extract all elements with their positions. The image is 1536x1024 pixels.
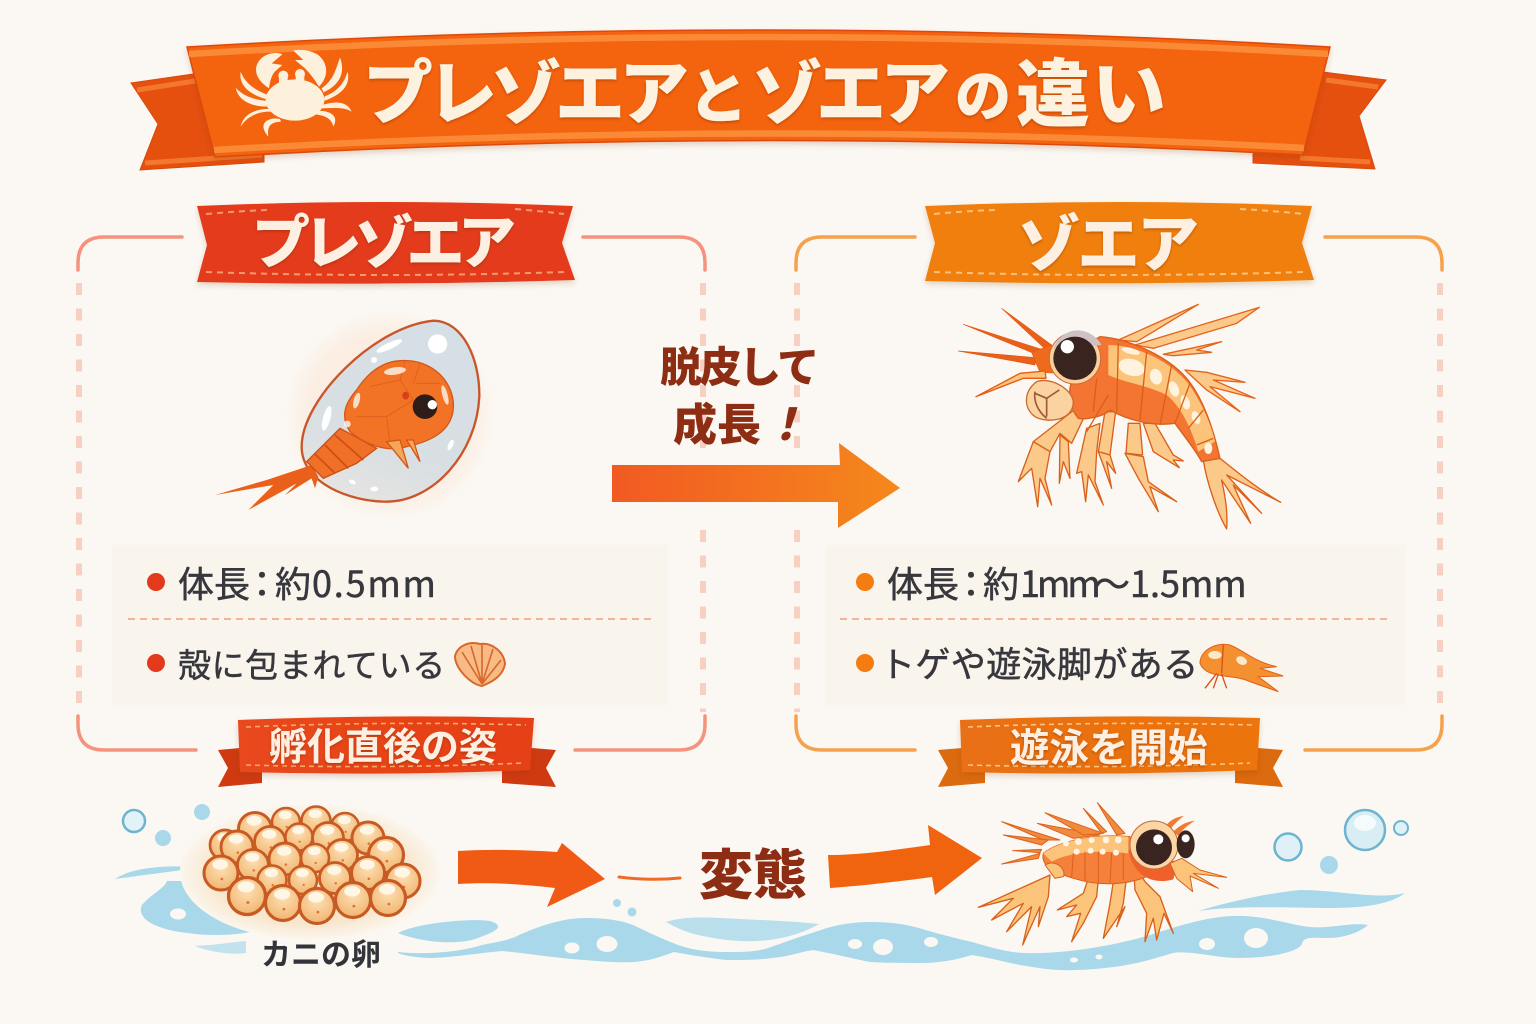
icon: seashell xyxy=(455,643,505,686)
heading ribbon: プレゾエア xyxy=(197,202,575,284)
body back band xyxy=(1043,836,1128,862)
text: body length: 1mm xyxy=(1020,556,1098,608)
larva head xyxy=(345,361,453,449)
ribbon: just after hatching: 孵化直後の姿 xyxy=(269,727,497,769)
text: body length: 体長 xyxy=(887,564,959,605)
banner main ribbon xyxy=(187,30,1330,157)
tail fan xyxy=(978,875,1050,945)
info box xyxy=(112,545,668,705)
heading ribbon: ゾエア: ゾエア xyxy=(1018,211,1197,280)
egg shell xyxy=(302,321,479,502)
title text: 違い xyxy=(1016,53,1168,136)
title text: と xyxy=(688,64,748,131)
head xyxy=(1128,850,1178,881)
eyes xyxy=(1130,821,1178,869)
bullet: shell xyxy=(147,654,165,672)
bullet: spines xyxy=(856,654,874,672)
ribbon: starts swimming: 遊泳を開始 xyxy=(1010,727,1208,771)
larva abdomen xyxy=(307,428,377,478)
title text: ゾエア xyxy=(752,55,948,133)
molting caption xyxy=(660,344,817,450)
text: body length: 1.5mm xyxy=(1130,556,1247,608)
dash before metamorphosis xyxy=(619,877,680,879)
wave: left pool xyxy=(115,866,280,935)
panel: prezoea xyxy=(78,202,705,787)
bubbles left xyxy=(123,804,210,846)
back spines xyxy=(1002,803,1125,864)
tail fan xyxy=(1203,458,1281,529)
ribbon: starts swimming xyxy=(938,716,1283,787)
body xyxy=(1070,337,1220,462)
title banner xyxy=(131,30,1386,170)
arrow: eggs to metamorphosis xyxy=(458,843,605,907)
panel: zoea xyxy=(796,202,1442,787)
larva eye xyxy=(413,394,437,419)
back spines xyxy=(1118,304,1259,412)
larva claws xyxy=(387,440,420,468)
eggs label: カニの卵 xyxy=(261,939,381,972)
wave: faint stroke by caption xyxy=(195,941,246,954)
panel frame xyxy=(78,237,705,750)
body pale band xyxy=(1108,345,1215,452)
bubbles right xyxy=(1274,810,1408,874)
wave: middle blob xyxy=(666,917,819,941)
illustration: prezoea in egg shell xyxy=(215,308,497,522)
front pincer xyxy=(1026,380,1073,420)
info box xyxy=(825,545,1405,705)
text: enclosed in shell: 殻に包まれている xyxy=(178,647,446,684)
larva highlights xyxy=(344,366,450,427)
bullet: size xyxy=(147,573,165,591)
heading ribbon: プレゾエア: プレゾエア xyxy=(252,211,515,276)
legs xyxy=(1018,407,1183,512)
molting caption: 成長！ xyxy=(673,400,807,450)
big eye xyxy=(1049,333,1101,384)
title text: プレゾエア xyxy=(363,55,687,133)
ribbon: just after hatching xyxy=(218,716,556,787)
bullet: size xyxy=(856,573,874,591)
larva tail spikes xyxy=(215,465,318,510)
horns xyxy=(1165,816,1195,836)
metamorphosis label: 変態 xyxy=(699,846,807,906)
egg glow xyxy=(283,308,497,522)
egg cluster xyxy=(204,806,420,924)
bubbles center xyxy=(613,899,636,916)
antennae spines xyxy=(958,308,1058,373)
text: body length: 〜 xyxy=(1094,556,1130,608)
wave: main xyxy=(398,916,1368,970)
legs xyxy=(1057,863,1173,942)
banner right tail xyxy=(1253,72,1386,169)
body xyxy=(1043,836,1147,884)
molting caption: 脱皮して xyxy=(660,344,817,391)
panel frame xyxy=(796,237,1442,750)
illustration: swimming zoea xyxy=(978,803,1227,945)
text: spines and swimming legs: トゲや遊泳脚がある xyxy=(880,646,1199,685)
text: body length: 体長 xyxy=(178,564,250,605)
text: body length: 約 xyxy=(983,564,1019,605)
text: body length: ： xyxy=(244,564,280,605)
icon: mini zoea xyxy=(1200,644,1283,692)
text: body length: 約 xyxy=(275,564,311,605)
title text: の xyxy=(955,65,1011,128)
wave: under eggs xyxy=(398,920,498,942)
icon: crab xyxy=(236,50,352,137)
crab eggs xyxy=(180,804,440,972)
body segments xyxy=(1087,343,1213,445)
foam spots xyxy=(170,908,1268,962)
arrow: metamorphosis to zoea xyxy=(828,825,982,895)
egg nest xyxy=(180,804,440,940)
arrow: prezoea to zoea xyxy=(612,443,900,528)
text: body length: 0.5mm xyxy=(312,556,438,608)
illustration: zoea xyxy=(958,304,1281,529)
shell highlights xyxy=(320,334,455,491)
text: body length: ： xyxy=(953,564,989,605)
banner left tail xyxy=(131,73,264,170)
water waves xyxy=(115,866,1405,970)
bubbles xyxy=(123,804,1408,916)
wave: upper right xyxy=(1198,890,1405,911)
heading ribbon: ゾエア xyxy=(925,202,1314,283)
